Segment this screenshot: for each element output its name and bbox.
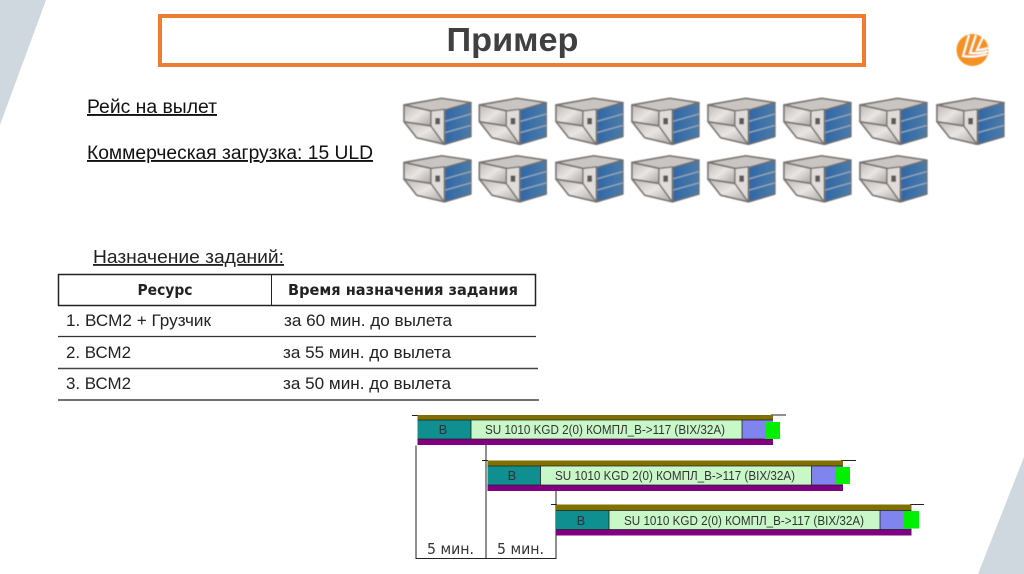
table header: time: Время назначения задания xyxy=(288,281,518,299)
icons: 15 ULD containers xyxy=(404,98,1004,202)
gantt bar 3: SU 1010 KGD 2(0) КОМПЛ_В->117 (BIX/32A) xyxy=(624,514,864,528)
icon: ULD row 1 xyxy=(404,98,1004,144)
row 2 xyxy=(66,344,452,362)
text: departing flight: Рейс на вылет xyxy=(87,97,217,118)
row 1 xyxy=(66,312,453,330)
label: 5 minutes first interval: 5 мин. xyxy=(427,540,474,558)
gantt bar 2 xyxy=(482,460,856,491)
timeline bracket lines xyxy=(416,445,556,558)
table header: resource: Ресурс xyxy=(138,281,192,299)
table: task assignment xyxy=(58,274,539,400)
label: 5 minutes second interval: 5 мин. xyxy=(497,540,544,558)
gantt bar 1: В xyxy=(439,422,447,437)
icon: company logo xyxy=(956,34,988,66)
row 1: 1. ВСМ2 + Грузчик xyxy=(66,312,212,330)
title box xyxy=(160,16,864,65)
gantt bar 2: SU 1010 KGD 2(0) КОМПЛ_В->117 (BIX/32A) xyxy=(555,469,795,483)
heading: task assignment: Назначение заданий: xyxy=(93,246,284,267)
gantt bar 3: В xyxy=(577,513,585,528)
icon: ULD row 2 xyxy=(404,156,927,202)
gantt bar 2: В xyxy=(508,468,516,483)
text: commercial load: Коммерческая загрузка: 15 ULD xyxy=(87,143,373,164)
title: Пример xyxy=(446,21,578,58)
row 2: 2. ВСМ2 xyxy=(66,344,131,362)
row 2: за 55 мин. до вылета xyxy=(283,344,452,362)
row 1: за 60 мин. до вылета xyxy=(284,312,453,330)
background: bottom right wedge xyxy=(978,457,1024,574)
gantt bar 3 xyxy=(551,504,924,536)
background: top left wedge xyxy=(0,0,46,125)
row 3 xyxy=(66,375,452,393)
row 3: 3. ВСМ2 xyxy=(66,375,131,393)
row 3: за 50 мин. до вылета xyxy=(283,375,452,393)
gantt bar 1 xyxy=(412,415,786,445)
gantt bar 1: SU 1010 KGD 2(0) КОМПЛ_В->117 (BIX/32A) xyxy=(485,423,725,437)
